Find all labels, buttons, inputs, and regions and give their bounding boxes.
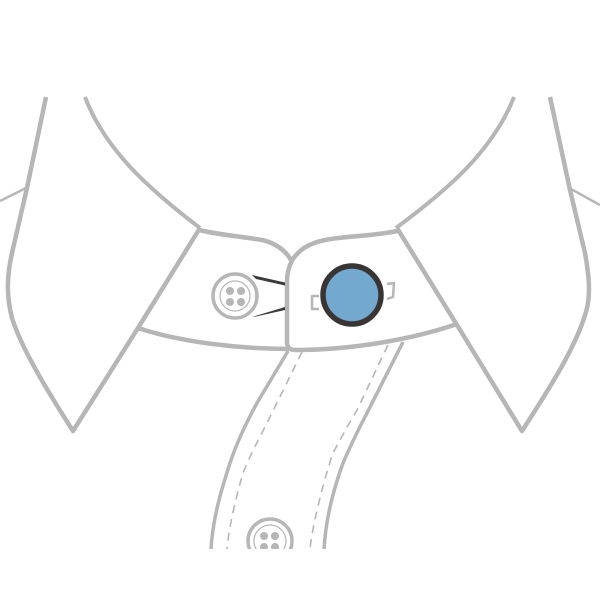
- buttonhole brackets: [312, 283, 394, 309]
- neckline curve: [85, 97, 200, 228]
- lower placket button: [246, 517, 294, 549]
- right collar band: [287, 231, 457, 350]
- placket edges: [211, 351, 288, 549]
- placket stitching: [227, 352, 302, 549]
- shirt collar illustration: [0, 96, 600, 550]
- collar button: [213, 274, 257, 318]
- left collar band: [199, 230, 291, 260]
- shoulder lines: [0, 188, 600, 205]
- arrow lines to buttonhole: [252, 275, 285, 317]
- left collar wing: [8, 97, 200, 431]
- right collar wing: [397, 97, 589, 431]
- blue button: [323, 266, 381, 324]
